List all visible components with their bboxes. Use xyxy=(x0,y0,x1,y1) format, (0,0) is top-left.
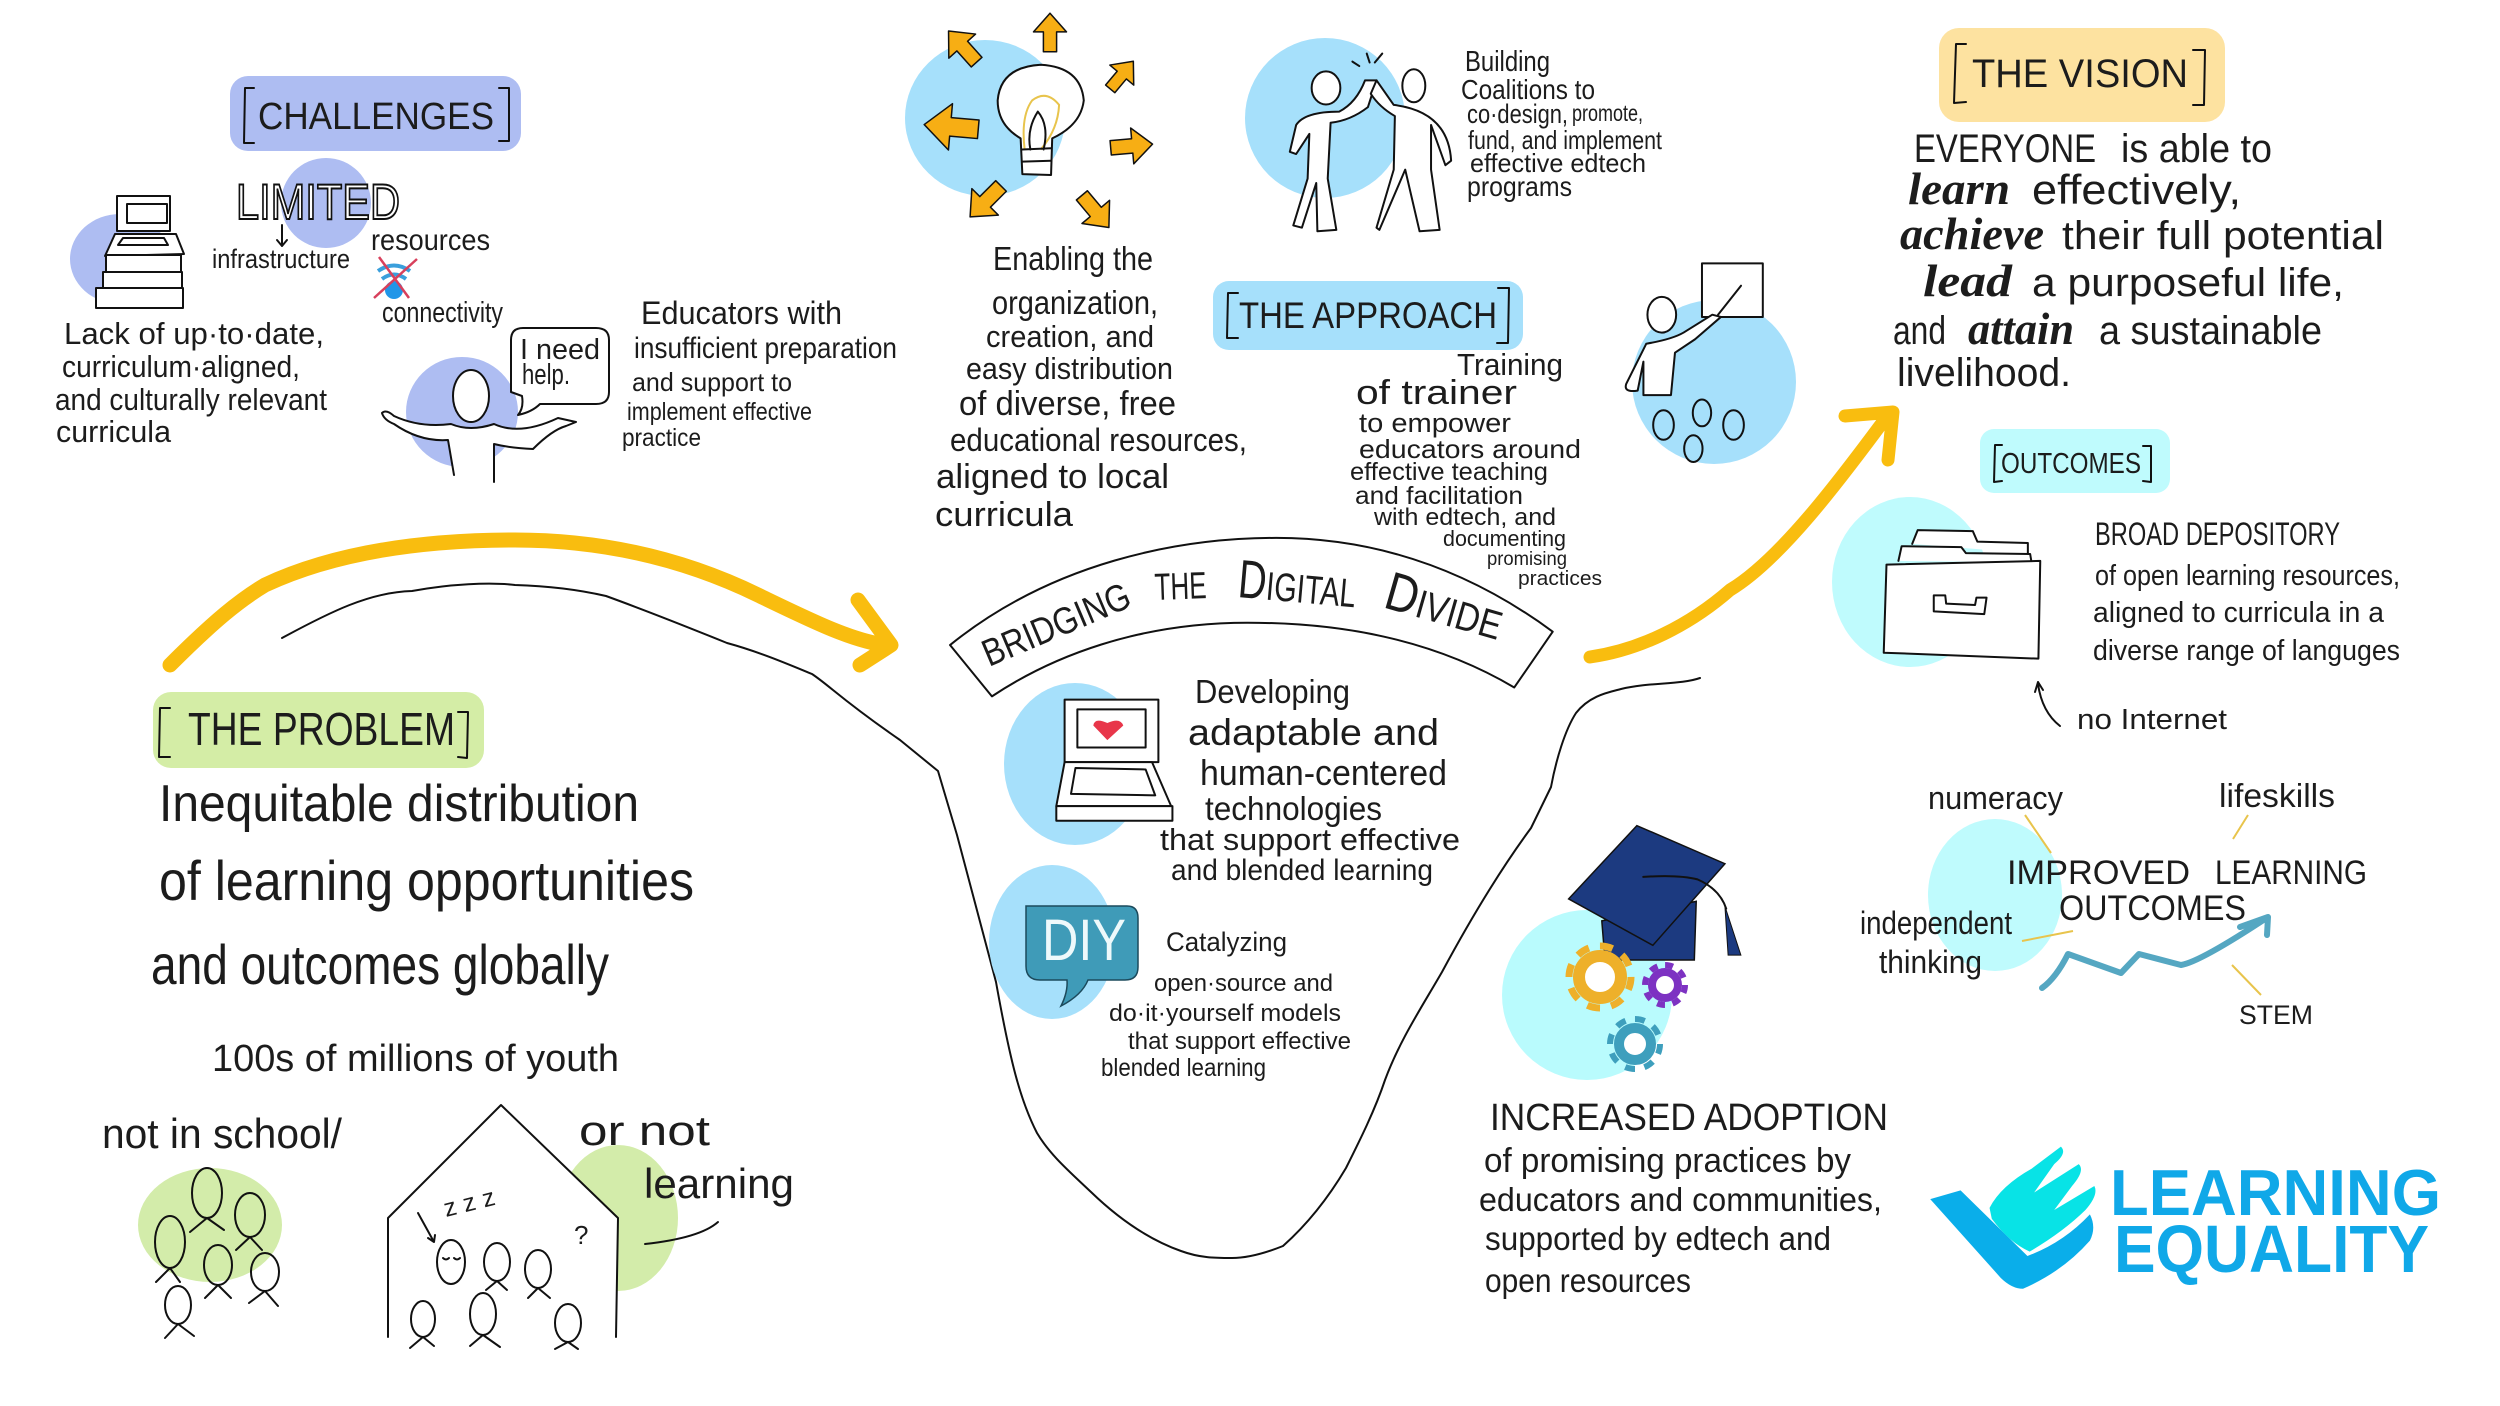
text: vision statement: lead xyxy=(1923,255,2013,306)
text: lack of curricula xyxy=(55,316,327,449)
heading: the vision xyxy=(1939,28,2225,122)
improved learning outcomes cluster: independent xyxy=(1860,905,2012,941)
text: enabling resources: Enabling the xyxy=(993,240,1153,277)
improved learning outcomes cluster: LEARNING xyxy=(2215,854,2367,892)
text: educators with insufficient preparation: insufficient preparation xyxy=(634,332,897,365)
text: enabling resources xyxy=(935,240,1247,534)
limited resources cluster: resources xyxy=(371,224,490,257)
text: educators with insufficient preparation: practice xyxy=(622,424,701,452)
text: vision statement: livelihood. xyxy=(1897,351,2071,395)
text: vision statement: a sustainable xyxy=(2099,309,2322,353)
text: training of trainers: educators around xyxy=(1359,434,1581,464)
banner: bridging the digital divide xyxy=(950,538,1553,696)
text: lack of curricula: Lack of up·to·date, xyxy=(64,316,324,351)
text: training of trainers xyxy=(1350,347,1602,590)
heading: outcomes: OUTCOMES xyxy=(2001,448,2141,480)
text: problem statement: of learning opportunities xyxy=(159,849,694,912)
annotation: no internet: no Internet xyxy=(2077,704,2227,736)
text: increased adoption: supported by edtech and xyxy=(1485,1220,1831,1257)
banner: bridging the digital divide: BRIDGING xyxy=(976,575,1137,675)
text: increased adoption: INCREASED ADOPTION xyxy=(1490,1097,1888,1139)
text: broad depository: aligned to curricula in a xyxy=(2093,597,2385,629)
icon: shrugging educator with speech bubble: I need xyxy=(520,334,600,366)
text: building coalitions: effective edtech xyxy=(1470,148,1646,178)
text: building coalitions xyxy=(1461,46,1663,202)
banner: bridging the digital divide: DIGITAL xyxy=(1236,549,1359,619)
icon: crossed out wifi xyxy=(374,257,417,299)
heading: the approach xyxy=(1213,281,1523,350)
text: vision statement: effectively, xyxy=(2032,166,2241,213)
improved learning outcomes cluster: thinking xyxy=(1879,944,1982,980)
text: vision statement: achieve xyxy=(1900,208,2044,259)
text: developing technologies: that support effective xyxy=(1160,822,1460,857)
text: training of trainers: of trainer xyxy=(1356,374,1517,412)
arrow: yellow problem to approach xyxy=(170,540,891,665)
icon: DIY speech bubble xyxy=(989,865,1138,1019)
text: training of trainers: effective teaching xyxy=(1350,458,1548,486)
text: vision statement: a purposeful life, xyxy=(2032,261,2344,305)
text: vision statement: EVERYONE xyxy=(1914,127,2096,171)
text: building coalitions: programs xyxy=(1467,171,1572,202)
icon: shrugging educator with speech bubble xyxy=(382,328,609,482)
heading: the approach: THE APPROACH xyxy=(1239,295,1497,336)
text: enabling resources: curricula xyxy=(935,496,1073,534)
text: catalyzing diy models xyxy=(1101,927,1351,1082)
icon: graduation cap with gears xyxy=(1502,826,1741,1080)
text: building coalitions: co·design, xyxy=(1467,99,1568,129)
text: building coalitions: fund, and implement xyxy=(1468,125,1663,155)
text: enabling resources: aligned to local xyxy=(936,458,1169,496)
panel: bridging content xyxy=(989,412,1893,1082)
text: building coalitions: Building xyxy=(1465,46,1550,78)
panel: the approach xyxy=(905,13,1796,590)
icon: DIY speech bubble: DIY xyxy=(1042,908,1126,973)
improved learning outcomes cluster: IMPROVED xyxy=(2007,854,2190,892)
text: developing technologies xyxy=(1160,673,1460,887)
text: catalyzing diy models: do·it·yourself models xyxy=(1109,1000,1341,1027)
text: catalyzing diy models: Catalyzing xyxy=(1166,927,1287,957)
text: building coalitions: promote, xyxy=(1572,100,1643,126)
text: training of trainers: and facilitation xyxy=(1355,482,1523,510)
text: training of trainers: Training xyxy=(1457,347,1563,382)
banner: bridging the digital divide: DIVIDE xyxy=(1379,561,1511,652)
text: broad depository: diverse range of languges xyxy=(2093,635,2400,667)
school house with students: ? xyxy=(574,1220,588,1250)
improved learning outcomes cluster: lifeskills xyxy=(2219,777,2335,814)
icon: shrugging educator with speech bubble: help. xyxy=(522,359,570,391)
text: vision statement: learn xyxy=(1908,163,2010,214)
text: developing technologies: technologies xyxy=(1205,790,1382,827)
text: problem statement: Inequitable distribution xyxy=(159,775,639,833)
text: increased adoption: of promising practices by xyxy=(1484,1142,1851,1180)
school house with students: zzz xyxy=(441,1183,498,1223)
heading: outcomes xyxy=(1980,429,2170,493)
text: lack of curricula: curricula xyxy=(56,414,172,449)
text: training of trainers: promising xyxy=(1487,549,1567,570)
improved learning outcomes cluster: STEM xyxy=(2239,1000,2313,1030)
logo: learning equality xyxy=(1930,1147,2441,1289)
improved learning outcomes cluster: OUTCOMES xyxy=(2059,889,2246,928)
heading: the problem xyxy=(153,692,484,768)
text: vision statement: their full potential xyxy=(2062,214,2384,258)
text: increased adoption: educators and communities, xyxy=(1479,1181,1882,1218)
text: educators with insufficient preparation: implement effective xyxy=(627,398,812,426)
text: educators with insufficient preparation xyxy=(622,295,897,452)
school house with students xyxy=(388,1105,678,1349)
improved learning outcomes cluster xyxy=(1860,777,2367,1030)
icon: file cabinet xyxy=(1832,497,2040,667)
banner: bridging the digital divide: THE xyxy=(1154,565,1207,609)
group of youth not in school xyxy=(138,1168,282,1338)
text: broad depository: of open learning resources, xyxy=(2095,560,2400,592)
text: enabling resources: easy distribution xyxy=(966,351,1173,386)
improved learning outcomes cluster: numeracy xyxy=(1928,780,2063,816)
limited resources cluster: LIMITED xyxy=(236,174,400,230)
text: problem statement xyxy=(151,775,694,996)
text: educators with insufficient preparation: and support to xyxy=(632,367,792,397)
text: building coalitions: Coalitions to xyxy=(1461,74,1595,105)
limited resources cluster: connectivity xyxy=(382,297,503,329)
panel: outcomes and vision xyxy=(1479,28,2441,1299)
text: developing technologies: adaptable and xyxy=(1188,712,1439,753)
text: vision statement: is able to xyxy=(2121,127,2272,171)
text: problem statement: and outcomes globally xyxy=(151,933,609,996)
icon: two people high five xyxy=(1245,38,1451,231)
text: developing technologies: and blended learning xyxy=(1171,854,1433,887)
text: catalyzing diy models: blended learning xyxy=(1101,1054,1266,1082)
text: enabling resources: educational resources, xyxy=(950,422,1247,458)
logo: learning equality: EQUALITY xyxy=(2114,1212,2429,1287)
heading: challenges: CHALLENGES xyxy=(258,96,494,138)
text: increased adoption: open resources xyxy=(1485,1262,1691,1299)
panel: challenges xyxy=(55,76,897,482)
annotation: no internet xyxy=(2035,682,2227,736)
text: developing technologies: human-centered xyxy=(1200,752,1447,793)
text: or not learning: or not xyxy=(579,1107,710,1154)
text: youth count: 100s of millions of youth xyxy=(212,1038,619,1080)
heading: challenges xyxy=(230,76,521,151)
text: or not learning xyxy=(579,1107,794,1244)
text: training of trainers: with edtech, and xyxy=(1373,504,1556,531)
text: not in school: not in school/ xyxy=(102,1110,342,1157)
outline: digital divide valley xyxy=(282,584,1700,1258)
text: enabling resources: of diverse, free xyxy=(959,385,1176,423)
text: lack of curricula: and culturally relevant xyxy=(55,382,327,417)
text: developing technologies: Developing xyxy=(1195,673,1350,710)
icon: computer on books xyxy=(70,196,184,308)
text: training of trainers: documenting xyxy=(1443,526,1566,551)
text: lack of curricula: curriculum·aligned, xyxy=(62,349,300,384)
text: educators with insufficient preparation: Educators with xyxy=(641,295,842,331)
text: increased adoption xyxy=(1479,1097,1888,1299)
text: catalyzing diy models: that support effective xyxy=(1128,1028,1351,1055)
text: enabling resources: creation, and xyxy=(986,319,1154,354)
icon: lightbulb with arrows xyxy=(905,13,1154,239)
heading: the problem: THE PROBLEM xyxy=(188,703,455,755)
text: training of trainers: to empower xyxy=(1359,408,1511,438)
logo: learning equality: LEARNING xyxy=(2110,1156,2441,1229)
text: catalyzing diy models: open·source and xyxy=(1154,970,1333,997)
heading: the vision: THE VISION xyxy=(1972,52,2188,96)
text: enabling resources: organization, xyxy=(992,284,1158,321)
text: vision statement: attain xyxy=(1968,303,2074,354)
icon: trainer at board with learners xyxy=(1626,263,1796,464)
text: broad depository xyxy=(2093,516,2400,667)
text: broad depository: BROAD DEPOSITORY xyxy=(2095,516,2340,552)
text: training of trainers: practices xyxy=(1518,568,1602,590)
text: or not learning: learning xyxy=(644,1160,794,1207)
text: vision statement: and xyxy=(1893,309,1946,353)
text: vision statement xyxy=(1893,127,2384,395)
limited resources cluster xyxy=(212,158,503,329)
panel: the problem xyxy=(102,692,794,1349)
limited resources cluster: infrastructure xyxy=(212,244,350,274)
arrow: yellow to vision xyxy=(1590,412,1893,657)
icon: laptop with heart xyxy=(1004,683,1172,845)
